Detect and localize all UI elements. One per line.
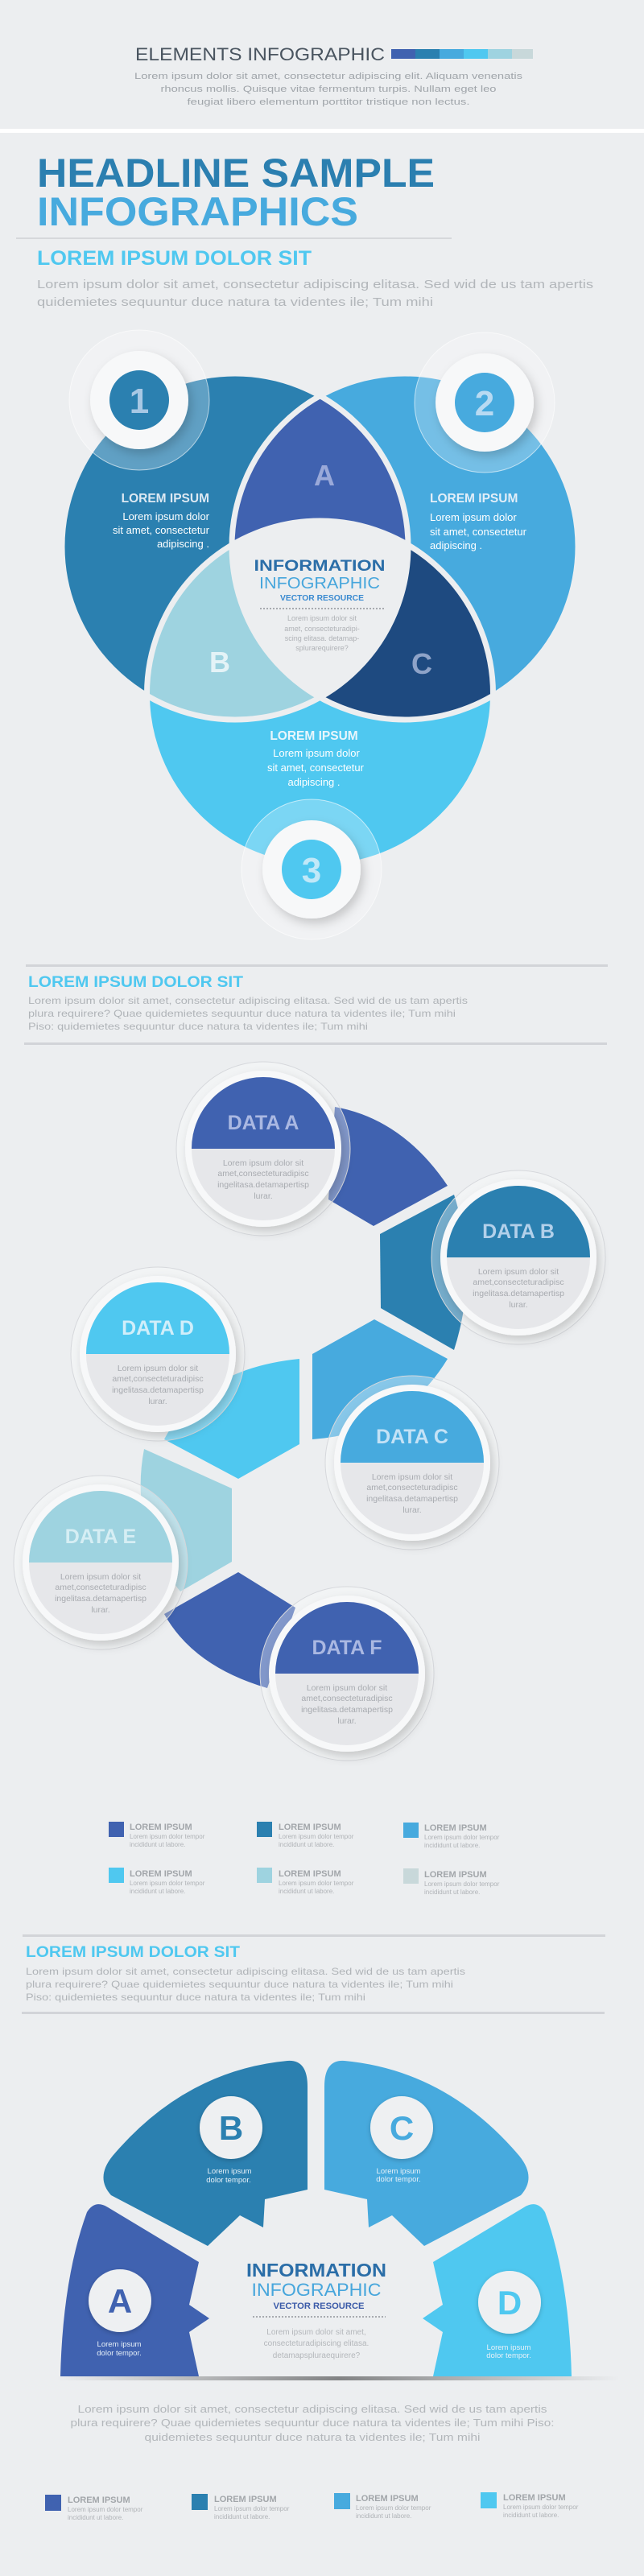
badge 1: 1	[130, 382, 149, 421]
section 3 text: plura requirere? Quae quidemietes sequuntur duce natura ta videntes ile; Tum mihi	[26, 1979, 453, 1990]
header title: ELEMENTS INFOGRAPHIC	[135, 44, 385, 64]
DATA F: ingelitasa.detamapertisp	[301, 1705, 393, 1715]
venn letters: C	[411, 647, 432, 680]
segment labels: Lorem ipsum	[377, 2167, 421, 2176]
section 2 text: Lorem ipsum dolor sit amet, consectetur adipiscing elitasa. Sed wid de us tam apertis	[28, 995, 468, 1006]
section 3 heading: LOREM IPSUM DOLOR SIT	[26, 1944, 240, 1961]
venn letters: B	[209, 646, 230, 679]
section 2 heading: LOREM IPSUM DOLOR SIT	[28, 974, 243, 991]
section 3 text: Piso: quidemietes sequuntur duce natura ta videntes ile; Tum mihi	[26, 1992, 365, 2003]
bottom text	[71, 2403, 554, 2443]
segment labels: Lorem ipsum	[97, 2340, 142, 2349]
legend 2: Lorem ipsum dolor tempor	[356, 2504, 431, 2512]
DATA A	[176, 1062, 350, 1236]
DATA C: Lorem ipsum dolor sit	[372, 1472, 452, 1482]
venn text 2: LOREM IPSUM	[430, 492, 518, 506]
badge C	[370, 2096, 433, 2159]
legend 2: LOREM IPSUM	[356, 2494, 419, 2504]
venn center text: scing elitasa. detamap-	[285, 634, 359, 642]
legend 1: Lorem ipsum dolor tempor	[424, 1834, 500, 1841]
subheading: LOREM IPSUM DOLOR SIT	[37, 247, 312, 270]
center text	[246, 2260, 386, 2360]
venn text 3	[267, 729, 365, 788]
venn text 1: adipiscing .	[157, 538, 209, 550]
legend 1: LOREM IPSUM	[130, 1823, 192, 1832]
DATA A: DATA A	[228, 1112, 299, 1134]
legend 1: incididunt ut labore.	[130, 1888, 185, 1895]
DATA D: Lorem ipsum dolor sit	[118, 1364, 198, 1373]
badge A	[89, 2269, 151, 2332]
segments	[141, 1107, 467, 1688]
badge D: D	[497, 2284, 522, 2322]
legend 1: LOREM IPSUM	[130, 1869, 192, 1879]
venn center text: INFOGRAPHIC	[259, 575, 380, 592]
center text: Lorem ipsum dolor sit amet,	[266, 2328, 366, 2337]
section 3 text: Lorem ipsum dolor sit amet, consectetur adipiscing elitasa. Sed wid de us tam apertis	[26, 1966, 465, 1977]
badge A: A	[108, 2282, 132, 2320]
center text: INFORMATION	[246, 2260, 386, 2281]
legend 1: incididunt ut labore.	[130, 1841, 185, 1848]
segment labels	[97, 2167, 531, 2360]
legend 1: incididunt ut labore.	[279, 1888, 334, 1895]
legend 2: incididunt ut labore.	[503, 2512, 559, 2519]
segment labels: Lorem ipsum	[208, 2167, 252, 2176]
badge 2	[415, 332, 555, 473]
center text: consecteturadipiscing elitasa.	[264, 2339, 369, 2348]
DATA F: Lorem ipsum dolor sit	[307, 1683, 387, 1693]
venn text 2: Lorem ipsum dolor	[430, 511, 517, 523]
venn center text	[254, 558, 385, 652]
section 2 text: Piso: quidemietes sequuntur duce natura ta videntes ile; Tum mihi	[28, 1021, 368, 1032]
DATA C: amet,consecteturadipisc	[366, 1483, 458, 1492]
venn text 2: adipiscing .	[430, 539, 482, 551]
semicircle chart	[56, 2061, 620, 2380]
headline	[37, 151, 435, 234]
DATA C: DATA C	[376, 1426, 448, 1448]
legend 2: Lorem ipsum dolor tempor	[503, 2504, 579, 2511]
segment A	[60, 2204, 209, 2376]
data chart	[14, 1062, 605, 1761]
venn center text: amet, consecteturadipi-	[284, 625, 360, 633]
DATA F: amet,consecteturadipisc	[301, 1694, 393, 1703]
legend 1: incididunt ut labore.	[424, 1889, 480, 1896]
header text: rhoncus mollis. Quisque vitae fermentum turpis. Nullam eget leo	[161, 85, 496, 94]
venn text 1: LOREM IPSUM	[122, 492, 209, 506]
venn text 3: sit amet, consectetur	[267, 762, 365, 774]
legend 2: incididunt ut labore.	[214, 2513, 270, 2520]
header text	[134, 72, 523, 107]
segment C	[324, 2061, 529, 2246]
legend 1: LOREM IPSUM	[424, 1870, 487, 1880]
header text: Lorem ipsum dolor sit amet, consectetur adipiscing elit. Aliquam venenatis	[134, 72, 523, 81]
venn center text: splurarequirere?	[295, 644, 349, 652]
DATA D: DATA D	[122, 1317, 194, 1340]
venn center text: VECTOR RESOURCE	[280, 594, 364, 603]
legend 2: Lorem ipsum dolor tempor	[214, 2505, 290, 2512]
legend 1: Lorem ipsum dolor tempor	[279, 1880, 354, 1887]
venn letters: A	[314, 459, 335, 492]
intro text: Lorem ipsum dolor sit amet, consectetur adipiscing elitasa. Sed wid de us tam apertis	[37, 278, 593, 291]
legend 2: incididunt ut labore.	[68, 2514, 123, 2521]
DATA E: lurar.	[91, 1605, 110, 1615]
legend 2: LOREM IPSUM	[503, 2493, 566, 2503]
DATA E	[14, 1476, 188, 1649]
DATA B: Lorem ipsum dolor sit	[478, 1267, 559, 1277]
venn text 2: sit amet, consectetur	[430, 526, 527, 538]
DATA F: lurar.	[337, 1716, 357, 1726]
DATA A: amet,consecteturadipisc	[217, 1169, 309, 1179]
badge B: B	[219, 2109, 243, 2147]
legend 2: LOREM IPSUM	[68, 2496, 130, 2505]
legend 1	[109, 1822, 500, 1896]
venn text 3: Lorem ipsum dolor	[273, 747, 360, 759]
DATA F: DATA F	[312, 1637, 382, 1659]
badge 3: 3	[302, 851, 321, 890]
DATA B: DATA B	[482, 1220, 555, 1243]
headline: HEADLINE SAMPLE	[37, 151, 435, 196]
badge B	[200, 2096, 262, 2159]
DATA D: lurar.	[148, 1397, 167, 1406]
badge 1	[69, 330, 209, 470]
legend 2	[45, 2492, 579, 2521]
headline: INFOGRAPHICS	[37, 189, 358, 234]
section 2 text	[28, 995, 468, 1032]
DATA C: lurar.	[402, 1505, 422, 1515]
legend 1: incididunt ut labore.	[424, 1842, 480, 1849]
legend 1: incididunt ut labore.	[279, 1841, 334, 1848]
legend 2: LOREM IPSUM	[214, 2495, 277, 2504]
segment B	[103, 2061, 308, 2246]
DATA D	[71, 1267, 245, 1441]
venn text 3: LOREM IPSUM	[270, 729, 358, 743]
venn center text: INFORMATION	[254, 558, 385, 575]
bottom text: plura requirere? Quae quidemietes sequuntur duce natura ta videntes ile; Tum mihi Piso:	[71, 2417, 554, 2429]
segment labels: dolor tempor.	[376, 2175, 421, 2184]
venn text 1	[113, 492, 210, 550]
legend 1: Lorem ipsum dolor tempor	[424, 1880, 500, 1888]
venn text 2	[430, 492, 527, 551]
color bar	[391, 49, 533, 59]
section 2 text: plura requirere? Quae quidemietes sequuntur duce natura ta videntes ile; Tum mihi	[28, 1008, 456, 1019]
legend 1: LOREM IPSUM	[279, 1869, 341, 1879]
header text: feugiat libero elementum porttitor tristique non lectus.	[187, 97, 470, 107]
bottom text: quidemietes sequuntur duce natura ta videntes ile; Tum mihi	[145, 2431, 481, 2443]
DATA A: lurar.	[254, 1191, 273, 1201]
center text: detamapspluraequirere?	[273, 2351, 361, 2360]
DATA D: ingelitasa.detamapertisp	[112, 1385, 204, 1395]
bottom text: Lorem ipsum dolor sit amet, consectetur adipiscing elitasa. Sed wid de us tam apertis	[77, 2403, 547, 2415]
DATA A: Lorem ipsum dolor sit	[223, 1158, 303, 1168]
segment labels: dolor tempor.	[97, 2349, 142, 2358]
center text: INFOGRAPHIC	[251, 2280, 382, 2300]
legend 2: incididunt ut labore.	[356, 2512, 411, 2520]
legend 1: LOREM IPSUM	[424, 1823, 487, 1833]
intro text	[37, 278, 593, 309]
legend 1: Lorem ipsum dolor tempor	[279, 1833, 354, 1840]
DATA B: ingelitasa.detamapertisp	[473, 1289, 564, 1298]
DATA A: ingelitasa.detamapertisp	[217, 1180, 309, 1190]
segment labels: Lorem ipsum	[487, 2343, 531, 2352]
baseline shadow	[56, 2376, 620, 2380]
venn text 3: adipiscing .	[287, 776, 341, 788]
venn text 1: sit amet, consectetur	[113, 524, 210, 536]
DATA B: amet,consecteturadipisc	[473, 1278, 564, 1287]
legend 2: Lorem ipsum dolor tempor	[68, 2506, 143, 2513]
badge C: C	[390, 2109, 414, 2147]
venn text 1: Lorem ipsum dolor	[122, 510, 210, 522]
header	[134, 44, 533, 107]
segment D	[423, 2204, 572, 2376]
DATA B: lurar.	[509, 1300, 528, 1310]
badge 2: 2	[475, 384, 494, 423]
legend 1: LOREM IPSUM	[279, 1823, 341, 1832]
DATA C: ingelitasa.detamapertisp	[366, 1494, 458, 1504]
legend 1: Lorem ipsum dolor tempor	[130, 1833, 205, 1840]
center text: VECTOR RESOURCE	[274, 2301, 364, 2311]
badge 3	[242, 799, 382, 939]
DATA C	[325, 1376, 499, 1550]
legend 1: Lorem ipsum dolor tempor	[130, 1880, 205, 1887]
intro text: quidemietes sequuntur duce natura ta videntes ile; Tum mihi	[37, 295, 433, 309]
segment labels: dolor tempor.	[486, 2351, 531, 2360]
venn diagram	[62, 374, 578, 867]
venn letters	[209, 459, 432, 680]
DATA F	[260, 1587, 434, 1761]
section 3 text	[26, 1966, 465, 2003]
DATA D: amet,consecteturadipisc	[112, 1374, 204, 1384]
DATA E: amet,consecteturadipisc	[55, 1583, 147, 1592]
venn center text: Lorem ipsum dolor sit	[287, 614, 357, 622]
DATA B	[431, 1170, 605, 1344]
badge D	[478, 2271, 541, 2334]
DATA E: DATA E	[65, 1525, 136, 1548]
DATA E: ingelitasa.detamapertisp	[55, 1594, 147, 1604]
segment labels: dolor tempor.	[206, 2176, 251, 2185]
DATA E: Lorem ipsum dolor sit	[60, 1572, 141, 1582]
